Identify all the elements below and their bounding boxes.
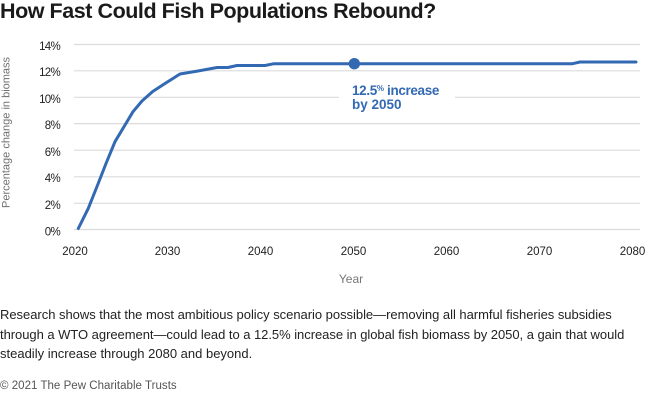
callout: [352, 83, 439, 112]
y axis labels: 10%: [39, 94, 60, 106]
y axis labels: 2%: [45, 200, 60, 212]
y axis labels: 8%: [45, 120, 60, 132]
y axis labels: [39, 41, 60, 238]
description text: steadily increase through 2080 and beyond.: [0, 346, 252, 361]
y axis labels: 14%: [39, 41, 60, 53]
data line: [78, 62, 636, 228]
callout: by 2050: [352, 96, 402, 112]
x axis labels: 2020: [62, 246, 88, 258]
callout: 12.5% increase: [352, 83, 439, 98]
y axis labels: 6%: [45, 147, 60, 159]
y axis title: Percentage change in biomass: [0, 56, 12, 208]
x axis title: Year: [339, 272, 363, 286]
y axis labels: 0%: [45, 226, 60, 238]
x axis labels: 2050: [341, 246, 366, 258]
description text: through a WTO agreement—could lead to a 12.5% increase in global fish biomass by 2050, a gain that would: [0, 326, 624, 342]
x axis labels: 2060: [434, 246, 459, 258]
y axis labels: 12%: [39, 67, 60, 79]
copyright: © 2021 The Pew Charitable Trusts: [0, 380, 177, 392]
data marker: [349, 58, 360, 69]
x axis labels: [62, 246, 645, 258]
description text: [0, 307, 624, 361]
description text: Research shows that the most ambitious policy scenario possible—removing all harmful fisheries subsidies: [0, 307, 612, 322]
x axis labels: 2040: [248, 246, 273, 258]
x axis labels: 2070: [527, 246, 552, 258]
x axis labels: 2080: [620, 246, 645, 258]
y axis labels: 4%: [45, 173, 60, 185]
x axis labels: 2030: [155, 246, 180, 258]
